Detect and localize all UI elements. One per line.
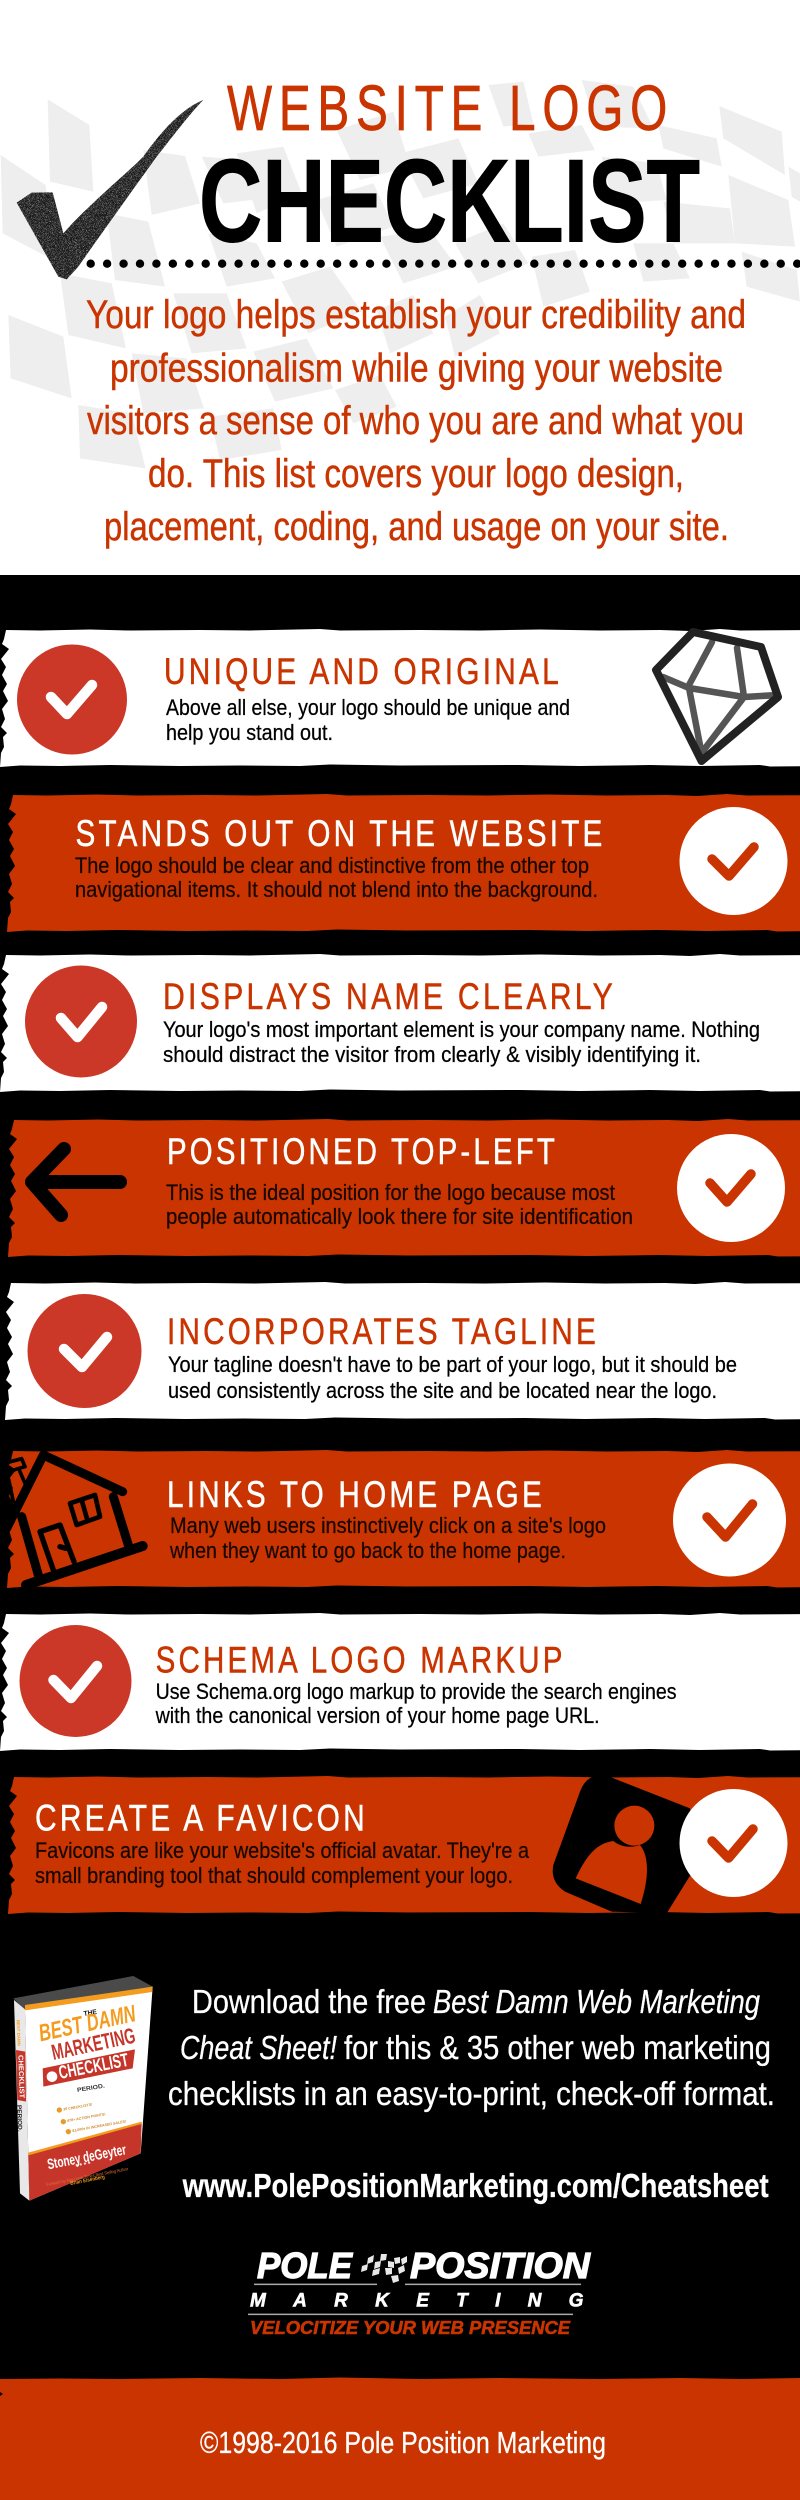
book cover image: MARKETING [49,2023,138,2065]
body text [169,1513,606,1563]
body text: with the canonical version of your home page URL. [155,1703,600,1728]
tagline: VELOCITIZE YOUR WEB PRESENCE [250,2318,571,2338]
icon: red check circle [17,644,127,754]
book cover image: CHECKLIST [57,2049,131,2083]
icon: large hand-drawn check mark [17,100,203,279]
book cover image: BEST DAMN [16,2020,22,2046]
book cover image: Forward by New York Times Best Selling Author [46,2166,129,2187]
heading: SCHEMA LOGO MARKUP [156,1640,566,1681]
background: checkered flag [1,80,800,468]
panel: schema logo markup [0,1613,800,1751]
panel: positioned top-left [8,1119,800,1257]
book cover image: $1,000s IN INCREASED SALES! [71,2119,127,2133]
logo: pole position marketing: MARKETING [250,2291,611,2312]
book cover image: CHECKLIST [16,2055,25,2099]
logo: pole position marketing: POLE [257,2245,353,2286]
icon: red check circle [28,1294,142,1408]
body text: Many web users instinctively click on a site's logo [170,1513,606,1538]
body text: help you stand out. [166,720,333,745]
book cover image [13,1976,153,2201]
body text: when they want to go back to the home page. [169,1538,566,1563]
icon: white check circle [673,1464,786,1576]
body text: used consistently across the site and be located near the logo. [168,1378,717,1403]
intro text: do. This list covers your logo design, [148,452,684,496]
icon: red check circle [25,966,137,1078]
body text: The logo should be clear and distinctive from the other top [75,853,589,878]
panel: unique and original [0,629,800,767]
call to action text: Cheat Sheet! [180,2029,337,2066]
panel: create a favicon [8,1775,800,1914]
icon: white check circle [680,807,788,915]
icon: left arrow [32,1149,120,1215]
body text [155,1679,677,1728]
book cover image: Brian Eisenberg [70,2174,105,2187]
body text: Above all else, your logo should be unique and [166,695,570,720]
book cover image: Stoney deGeyter [46,2142,128,2173]
book cover image: **** [75,2161,93,2171]
body text [163,1017,760,1067]
book cover image: 678+ ACTION POINTS! [67,2112,107,2123]
logo: pole position marketing: POSITION [410,2245,591,2286]
body text: navigational items. It should not blend into the background. [75,877,598,902]
call to action text [168,1983,775,2112]
body text [35,1838,530,1888]
book cover image: 35 CHECKLISTS! [63,2102,93,2112]
icon: white check circle [680,1789,788,1897]
panel: links to home page [7,1450,800,1588]
panel: footer [0,2378,800,2500]
heading: CREATE A FAVICON [35,1798,368,1839]
logo: pole position marketing [248,2245,611,2338]
body text: should distract the visitor from clearly & visibly identifying it. [163,1042,701,1067]
body text: Your tagline doesn't have to be part of your logo, but it should be [168,1352,737,1377]
body text [75,853,598,902]
icon: avatar card [553,1775,697,1913]
icon: diamond [656,632,778,761]
heading: UNIQUE AND ORIGINAL [164,651,562,692]
copyright: ©1998-2016 Pole Position Marketing [200,2425,606,2460]
header background [0,0,800,575]
heading: DISPLAYS NAME CLEARLY [163,976,616,1017]
panel: incorporates tagline [5,1282,800,1420]
black background [0,575,800,2500]
book cover image: BEST DAMN [36,2000,139,2047]
book cover image: PERIOD. [77,2084,106,2094]
body text: people automatically look there for site identification [166,1204,633,1229]
book cover image: THE [83,2009,98,2018]
body text [166,1180,633,1229]
body text [168,1352,737,1403]
heading: STANDS OUT ON THE WEBSITE [76,813,606,854]
body text: This is the ideal position for the logo because most [166,1180,615,1205]
body text: Use Schema.org logo markup to provide the search engines [156,1679,677,1704]
icon: white check circle [677,1134,785,1242]
icon: checkered flag [361,2254,407,2283]
body text: Favicons are like your website's official avatar. They're a [35,1838,530,1863]
dotted divider [91,260,800,268]
body text [166,695,570,745]
heading: INCORPORATES TAGLINE [167,1311,599,1352]
heading: LINKS TO HOME PAGE [167,1474,545,1515]
icon: red check circle [20,1625,132,1737]
body text: small branding tool that should complement your logo. [35,1863,513,1888]
call to action text: Download the free [192,1983,426,2020]
panel: displays name clearly [0,954,800,1092]
heading: POSITIONED TOP-LEFT [167,1131,558,1172]
book cover image: PERIOD. [15,2105,22,2132]
title [199,72,700,268]
panel: stands out on the website [7,794,800,932]
icon: house [7,1455,143,1585]
intro text [86,293,746,549]
